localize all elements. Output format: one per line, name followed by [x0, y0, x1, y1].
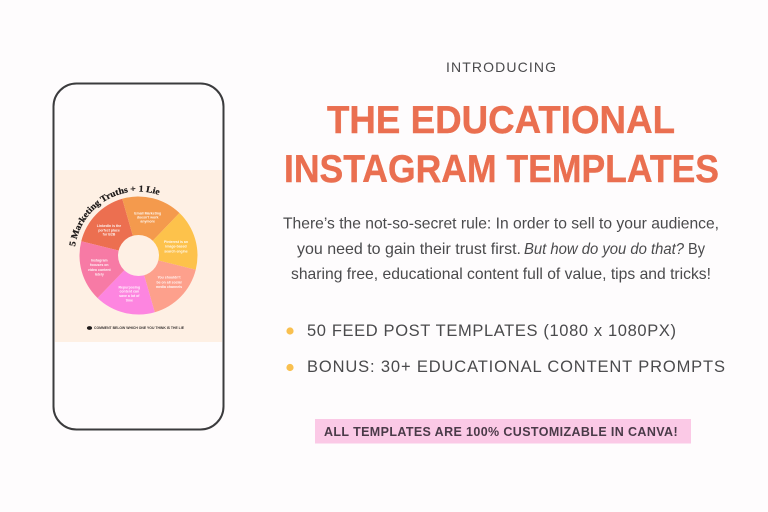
paragraph line 1: There’s the not-so-secret rule: In order to sell to your audience, [283, 216, 719, 232]
label: Pinterest: image-based [165, 245, 187, 249]
donut chart [79, 196, 198, 315]
segment: Instagram [79, 241, 138, 298]
callout banner [315, 419, 691, 444]
banner text: ALL TEMPLATES ARE 100% CUSTOMIZABLE IN CANVA! [324, 424, 678, 439]
label: Email Marketing: Email Marketing [134, 211, 161, 215]
label: social media channels: be on all social [156, 280, 182, 284]
feature 2: BONUS: 30+ EDUCATIONAL CONTENT PROMPTS [307, 358, 725, 376]
donut hole [118, 235, 159, 276]
paragraph line 2 end: By [688, 241, 705, 258]
bullet 1 [286, 327, 294, 335]
bullet 2 [286, 364, 294, 371]
banner background [315, 419, 691, 444]
label: LinkedIn: LinkedIn is the [97, 224, 121, 228]
icon: speech bubble [87, 326, 92, 330]
paragraph line 2 start: you need to gain their trust first. [297, 241, 521, 258]
title line 2: INSTAGRAM TEMPLATES [284, 148, 719, 191]
title line 1: THE EDUCATIONAL [327, 99, 675, 142]
label: social media channels: media channels [156, 285, 182, 289]
phone mockup [52, 82, 224, 430]
label: Repurposing: save a lot of [119, 294, 140, 298]
label: Instagram: video content [88, 268, 112, 272]
label: Instagram: Instagram [91, 259, 108, 263]
segment: Pinterest [138, 213, 198, 270]
segment: social media channels [138, 256, 196, 312]
instagram post preview [55, 170, 222, 342]
title [284, 99, 719, 191]
label: Email Marketing: doesn’t work [137, 215, 159, 219]
feature 1: 50 FEED POST TEMPLATES (1080 x 1080PX) [307, 322, 676, 340]
feature list [286, 322, 725, 376]
post background [55, 170, 222, 342]
phone screen outline [54, 84, 224, 430]
segment: LinkedIn [81, 199, 138, 256]
label: Repurposing: content can [119, 290, 139, 294]
label: LinkedIn: perfect place [98, 228, 120, 232]
label: Instagram: lately [95, 272, 104, 276]
label: Instagram: focuses on [90, 263, 109, 267]
paragraph line 3: sharing free, educational content full of value, tips and tricks! [291, 266, 711, 283]
call to action: COMMENT BELOW WHICH ONE YOU THINK IS THE LIE [94, 326, 185, 330]
label: Pinterest: search engine [164, 249, 188, 253]
label: Pinterest: Pinterest is an [164, 240, 188, 244]
label: Repurposing: Repurposing [119, 285, 140, 289]
label: Email Marketing: anymore [140, 220, 155, 224]
eyebrow: introducing: INTRODUCING [446, 59, 556, 75]
segment: Email Marketing [122, 196, 179, 256]
intro paragraph [283, 216, 719, 283]
curved post title: 5 Marketing Truths + 1 Lie [69, 186, 160, 246]
label: LinkedIn: for B2B [103, 233, 116, 237]
label: Repurposing: time [126, 299, 133, 303]
label: social media channels: You shouldn’t [157, 276, 181, 280]
segment: Repurposing [98, 256, 155, 315]
paragraph line 2 italic: But how do you do that? [524, 241, 684, 258]
